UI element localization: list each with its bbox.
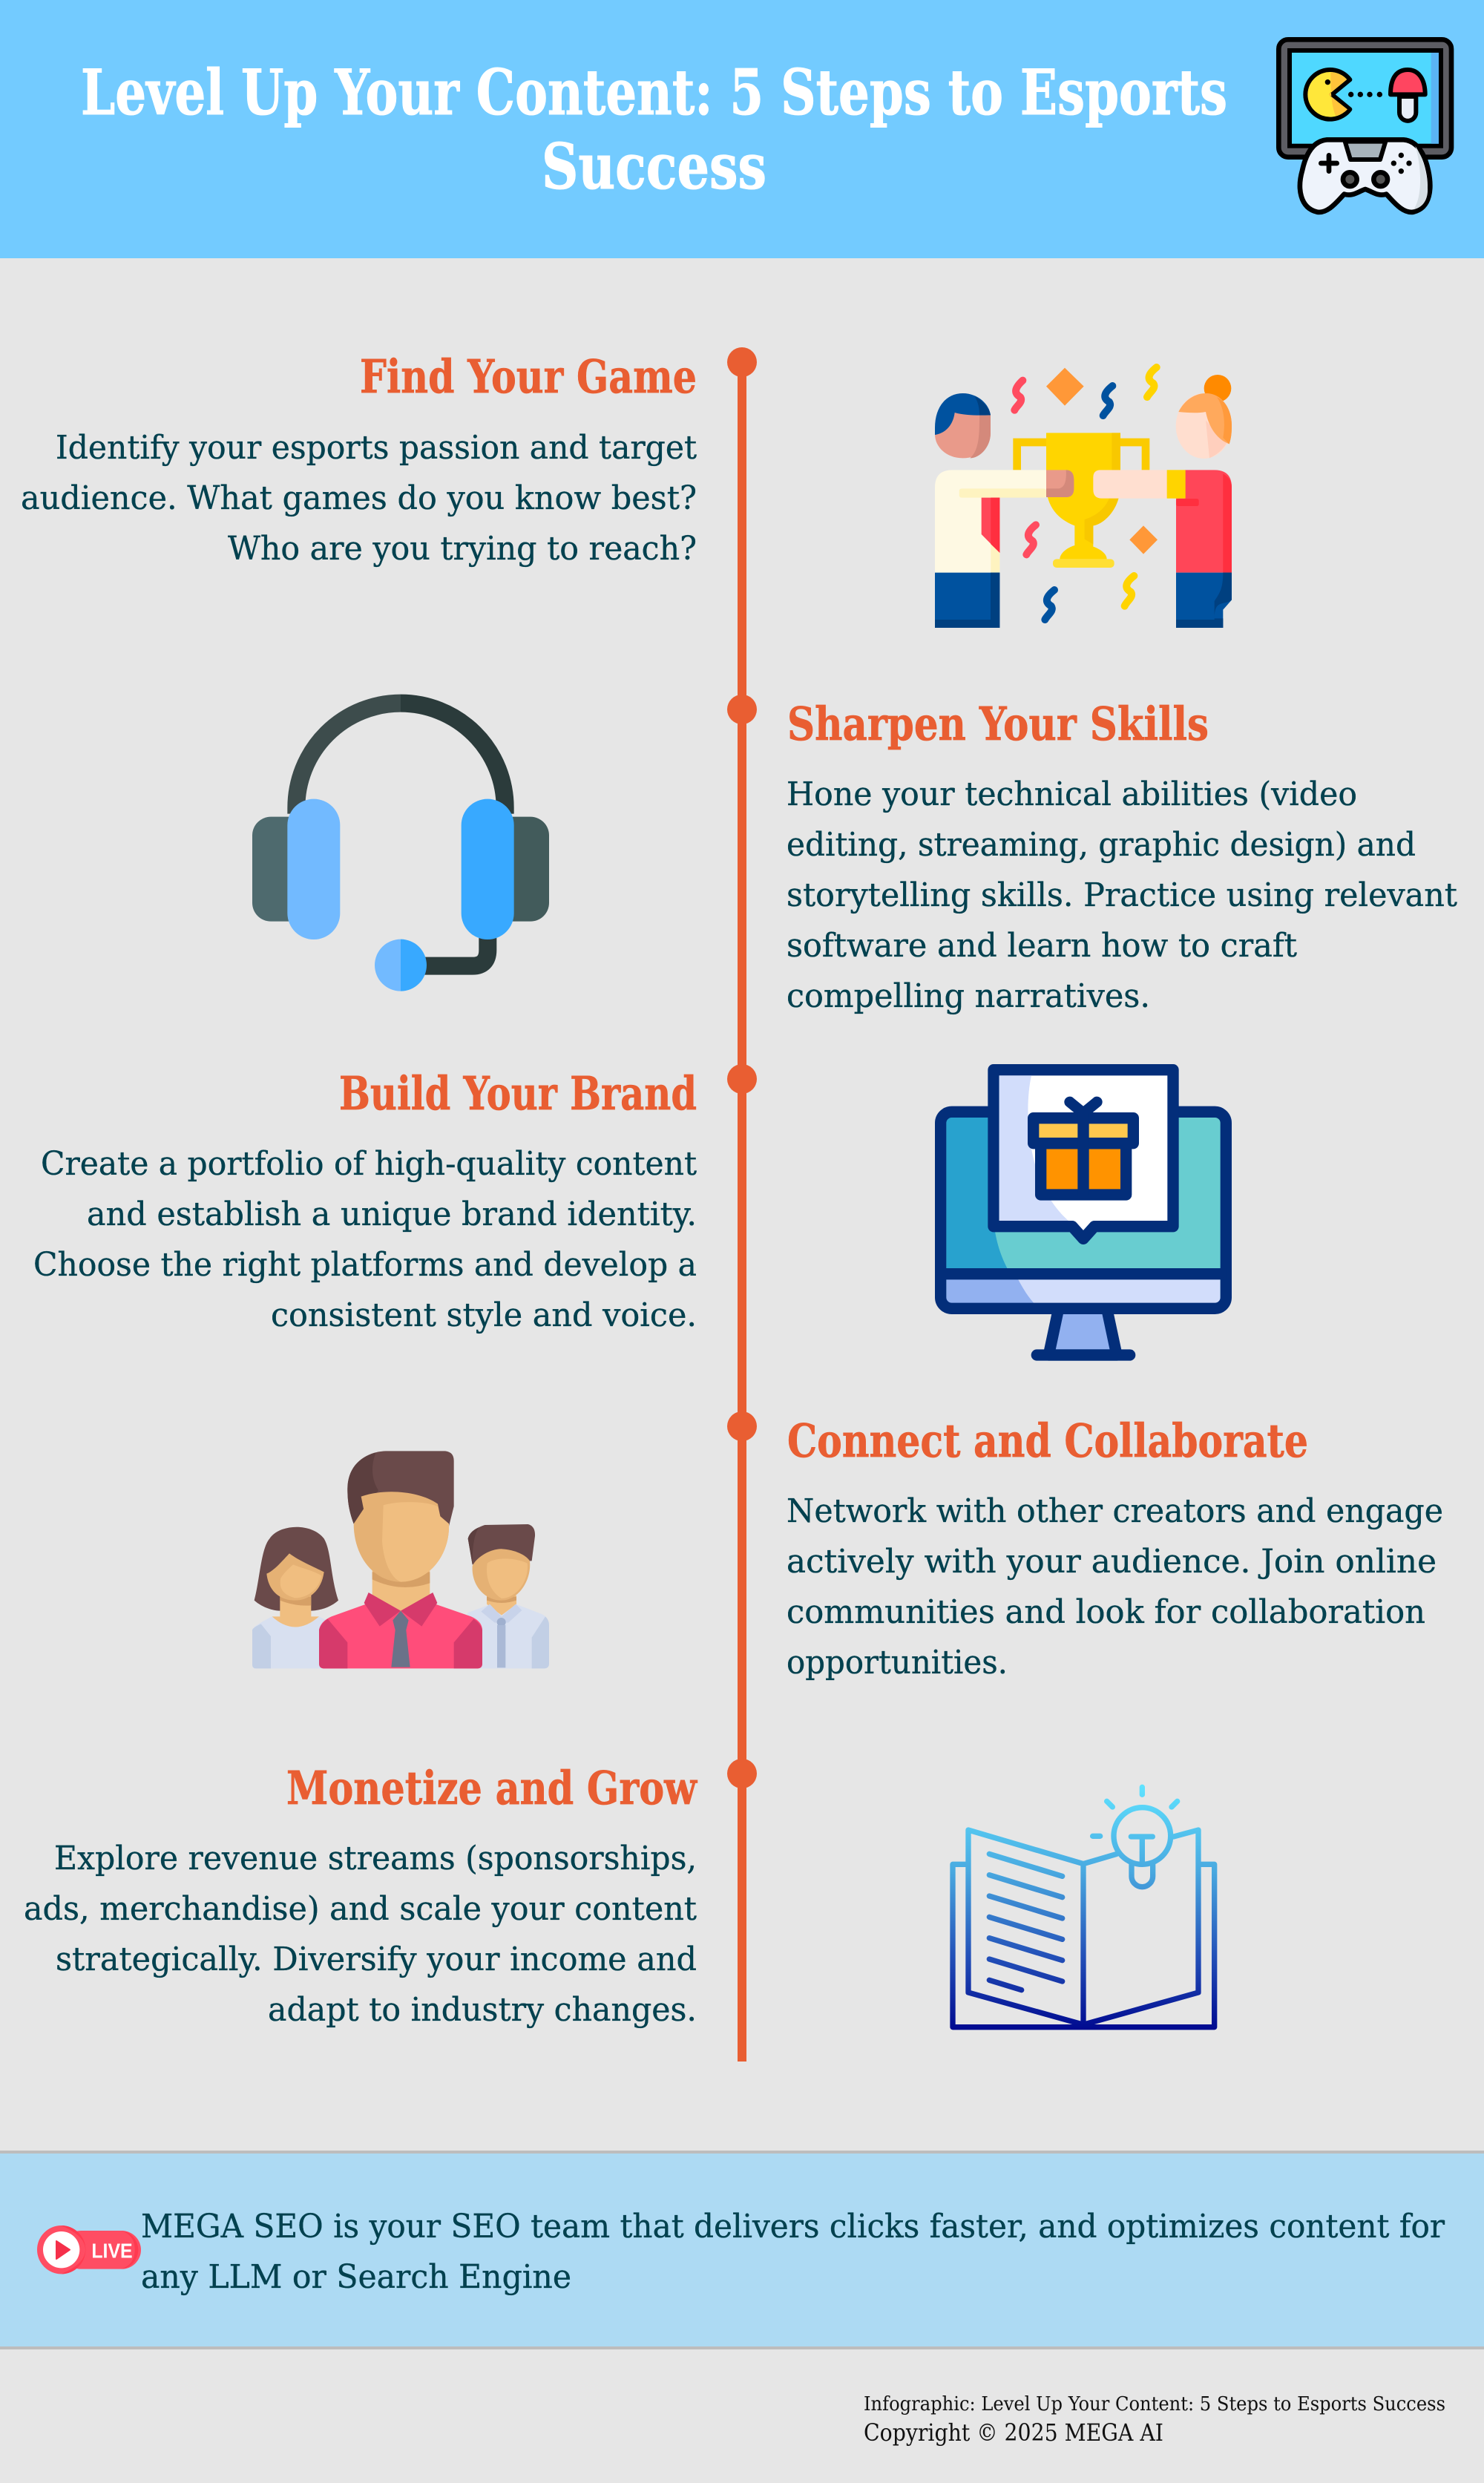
timeline dot 4 bbox=[727, 1411, 757, 1441]
step 4 text bbox=[787, 1414, 1443, 1682]
body: step 1 bbox=[21, 429, 697, 568]
timeline dot 5 bbox=[727, 1759, 757, 1788]
body: step 3: and establish a unique brand identity. bbox=[87, 1195, 697, 1233]
body: step 4 bbox=[787, 1492, 1443, 1682]
body: step 3: consistent style and voice. bbox=[271, 1296, 697, 1334]
footer credits: Infographic: Level Up Your Content: 5 Steps to Esports Success bbox=[864, 2393, 1445, 2415]
body: step 4: actively with your audience. Join online bbox=[787, 1543, 1437, 1581]
body: step 2: storytelling skills. Practice using relevant bbox=[787, 876, 1457, 914]
call-to-action text: MEGA SEO is your SEO team that delivers clicks faster, and optimizes content for bbox=[141, 2208, 1445, 2246]
footer credits bbox=[864, 2393, 1445, 2447]
body: step 5: Explore revenue streams (sponsorships, bbox=[54, 1840, 697, 1877]
body: step 3 bbox=[33, 1145, 697, 1334]
timeline dot 2 bbox=[727, 695, 757, 724]
icon: live badge: LIVE bbox=[91, 2240, 133, 2263]
step 5 text bbox=[24, 1761, 697, 2029]
body: step 4: opportunities. bbox=[787, 1644, 1008, 1682]
body: step 3: Create a portfolio of high-quality content bbox=[41, 1145, 697, 1183]
body: step 5: ads, merchandise) and scale your content bbox=[24, 1890, 697, 1928]
body: step 2: software and learn how to craft bbox=[787, 927, 1297, 965]
icon: trophy with two players bbox=[935, 367, 1232, 628]
icon: headset bbox=[252, 703, 549, 991]
heading: Connect and Collaborate: Connect and Collaborate bbox=[787, 1414, 1308, 1468]
step 1 text bbox=[21, 350, 697, 568]
icon: game monitor and controller bbox=[1278, 39, 1451, 212]
body: step 4: Network with other creators and engage bbox=[787, 1492, 1443, 1530]
icon: live badge bbox=[37, 2225, 141, 2274]
icon: three people bbox=[252, 1451, 549, 1668]
body: step 1: Who are you trying to reach? bbox=[228, 530, 697, 568]
heading: Sharpen Your Skills: Sharpen Your Skills bbox=[787, 697, 1209, 751]
call-to-action band bbox=[0, 2151, 1484, 2349]
body: step 5 bbox=[24, 1840, 697, 2029]
icon: open book with light bulb bbox=[953, 1787, 1215, 2027]
timeline dot 1 bbox=[727, 347, 757, 377]
body: step 1: Identify your esports passion and target bbox=[56, 429, 697, 467]
timeline spine bbox=[727, 347, 757, 2061]
step 3 text bbox=[33, 1066, 697, 1334]
call-to-action text: any LLM or Search Engine bbox=[141, 2258, 571, 2296]
body: step 4: communities and look for collaboration bbox=[787, 1593, 1425, 1631]
body: step 2: Hone your technical abilities (video bbox=[787, 775, 1357, 813]
icon: monitor with gift bubble bbox=[941, 1070, 1226, 1355]
body: step 2: editing, streaming, graphic design) and bbox=[787, 826, 1416, 864]
timeline dot 3 bbox=[727, 1064, 757, 1094]
body: step 5: adapt to industry changes. bbox=[268, 1991, 697, 2029]
heading: Monetize and Grow: Monetize and Grow bbox=[286, 1761, 697, 1815]
body: step 3: Choose the right platforms and develop a bbox=[33, 1246, 697, 1284]
step 2 text bbox=[787, 697, 1457, 1015]
body: step 1: audience. What games do you know best? bbox=[21, 479, 697, 517]
body: step 5: strategically. Diversify your income and bbox=[56, 1941, 697, 1978]
title: Success bbox=[542, 130, 766, 203]
footer credits: Copyright © 2025 MEGA AI bbox=[864, 2418, 1163, 2447]
body: step 2: compelling narratives. bbox=[787, 977, 1150, 1015]
body: step 2 bbox=[787, 775, 1457, 1015]
heading: Build Your Brand: Build Your Brand bbox=[339, 1066, 697, 1121]
heading: Find Your Game: Find Your Game bbox=[360, 350, 697, 404]
title bbox=[81, 56, 1227, 203]
call-to-action text bbox=[141, 2208, 1445, 2296]
header banner bbox=[0, 0, 1484, 258]
